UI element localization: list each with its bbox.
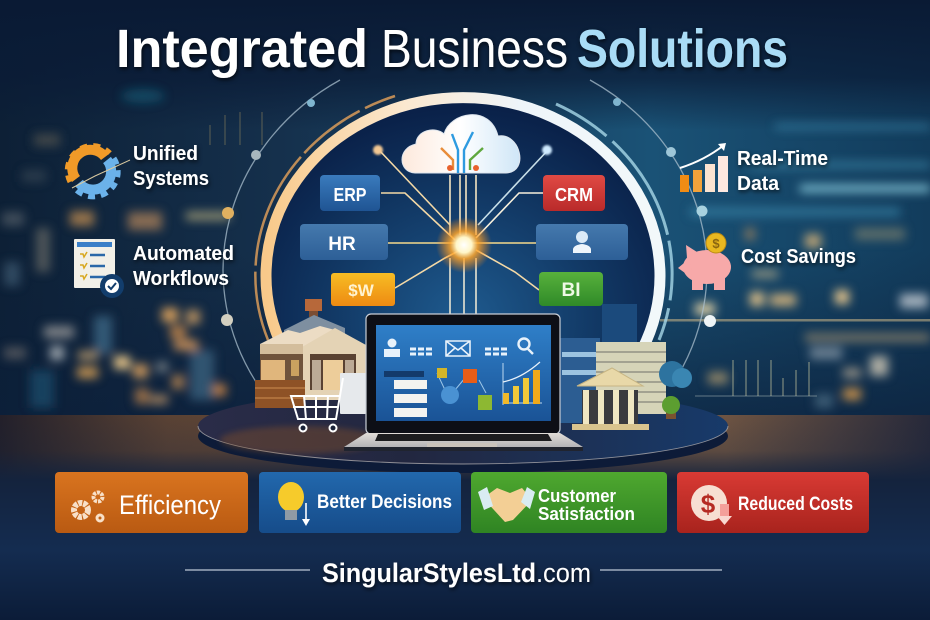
card: efficiency: Efficiency [119, 490, 221, 520]
website footer [185, 558, 722, 588]
feature: cost savings [678, 233, 856, 290]
icon: gears [74, 492, 103, 521]
icon: piggy bank: $ [712, 236, 720, 251]
card: reduced costs [677, 472, 869, 533]
tag: $W: $W [348, 281, 375, 300]
feature: cost savings: Cost Savings [741, 246, 856, 268]
icon: cloud [402, 115, 520, 173]
title [116, 19, 788, 79]
icon: checklist [74, 239, 124, 298]
tag: CRM [543, 175, 605, 211]
title: Business [381, 19, 568, 79]
tag: ERP [320, 175, 380, 211]
tag: HR [300, 224, 388, 260]
house and shop [255, 299, 366, 414]
tag: HR: HR [328, 234, 356, 255]
shopping cart [291, 378, 343, 432]
website footer: .com [536, 558, 591, 588]
connector end nodes [373, 145, 552, 246]
table surface [0, 415, 930, 480]
icon: light bulb [278, 482, 310, 526]
platform [198, 388, 728, 473]
feature: unified systems: Systems [133, 168, 209, 190]
feature: unified systems [67, 143, 209, 197]
card: reduced costs: Reduced Costs [738, 494, 853, 515]
title: Solutions [577, 19, 788, 79]
bank building [572, 368, 680, 430]
outer orbit with nodes [221, 80, 716, 385]
central glow [436, 217, 492, 273]
icon: dollar with down arrow [691, 485, 732, 525]
icon: handshake [478, 487, 535, 522]
tag: ERP: ERP [334, 185, 366, 205]
website footer: SingularStylesLtd [322, 558, 536, 588]
icon: dollar with down arrow: $ [701, 489, 716, 519]
card: efficiency [55, 472, 248, 533]
tag: CRM: CRM [555, 185, 593, 205]
icon: piggy bank [678, 233, 731, 290]
tag: BI [539, 272, 603, 306]
icon: rising bars [680, 143, 728, 192]
feature: automated workflows: Automated [133, 243, 234, 265]
card: customer satisfaction [471, 472, 667, 533]
feature: automated workflows [74, 239, 234, 298]
feature: real-time data: Real-Time [737, 148, 828, 170]
card: better decisions [259, 472, 461, 533]
laptop [344, 314, 583, 451]
office buildings [560, 304, 692, 423]
title: Integrated [116, 19, 368, 79]
tag: BI: BI [562, 280, 580, 301]
lower background band [0, 480, 930, 620]
card: better decisions: Better Decisions [317, 492, 452, 513]
tag: person [536, 224, 628, 260]
feature: unified systems: Unified [133, 143, 198, 165]
feature: real-time data: Data [737, 173, 780, 195]
tag: $W [331, 273, 395, 306]
connector lines [379, 150, 548, 314]
card: customer satisfaction: Customer [538, 485, 616, 506]
card: customer satisfaction: Satisfaction [538, 503, 635, 524]
icon: gear [67, 146, 130, 197]
feature: automated workflows: Workflows [133, 268, 229, 290]
central hub circle [255, 96, 672, 449]
feature: real-time data [680, 143, 828, 195]
